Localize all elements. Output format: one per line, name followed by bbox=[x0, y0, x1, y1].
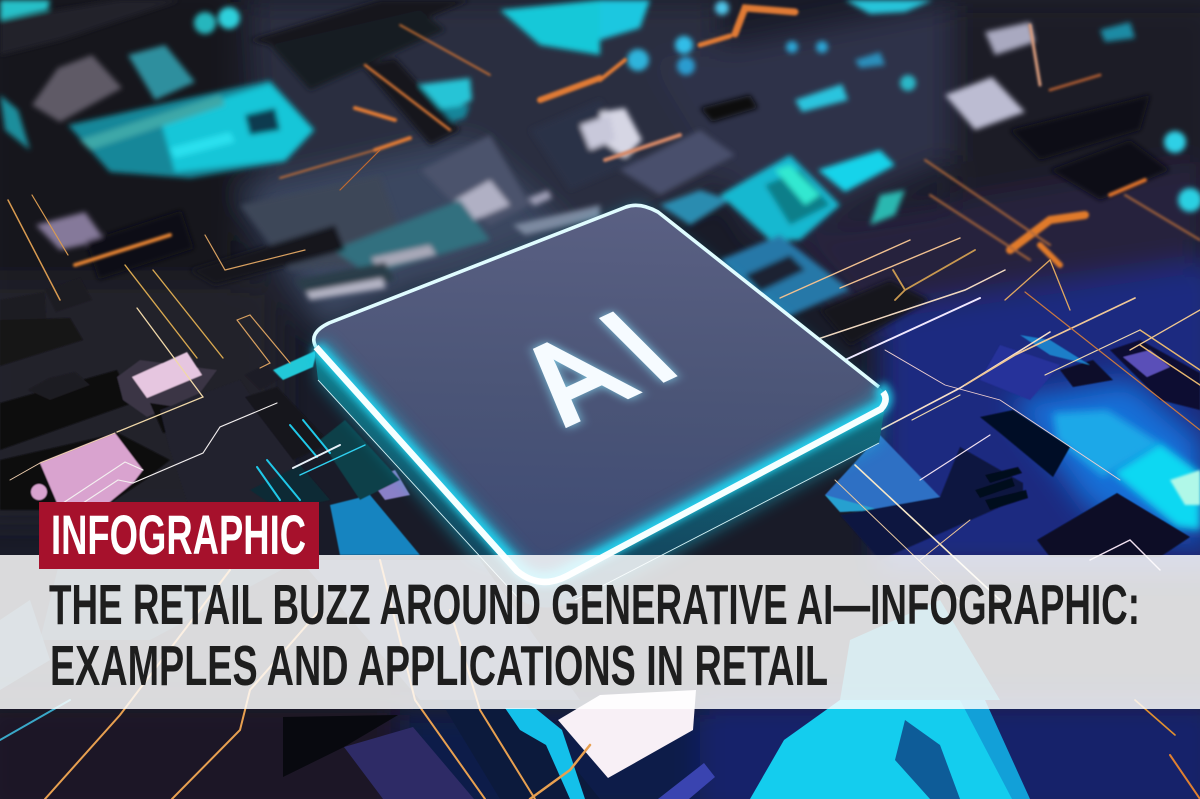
blurred components, top right bbox=[600, 108, 642, 158]
chip bottom edge light bbox=[316, 347, 886, 582]
title bbox=[49, 573, 1140, 698]
chip glow bbox=[316, 205, 885, 590]
chip bottom edge light glow bbox=[316, 347, 886, 580]
lower left board components bbox=[0, 278, 420, 555]
chip side lower line bbox=[318, 380, 879, 600]
category tag: INFOGRAPHIC bbox=[51, 503, 306, 566]
lower right board components bbox=[825, 435, 1028, 560]
faint shapes under banner bbox=[300, 560, 580, 700]
title: EXAMPLES AND APPLICATIONS IN RETAIL bbox=[50, 634, 828, 698]
chip top face bbox=[314, 205, 886, 580]
bottom components bbox=[0, 560, 1030, 799]
chip inner edge glow bbox=[316, 347, 886, 580]
circuit traces, glowing lines bbox=[8, 150, 1200, 600]
translucent title banner bbox=[0, 555, 1200, 709]
chip top edge light bbox=[314, 205, 879, 387]
chip side bbox=[314, 345, 886, 608]
AI letters: AI bbox=[487, 283, 719, 444]
bottom traces bbox=[0, 560, 1200, 799]
AI chip bbox=[314, 205, 886, 608]
blurred components, top left bbox=[0, 0, 1200, 345]
category tag bbox=[39, 502, 319, 569]
orange traces blurred bbox=[75, 8, 1200, 265]
AI letters glow: AI bbox=[487, 283, 719, 444]
